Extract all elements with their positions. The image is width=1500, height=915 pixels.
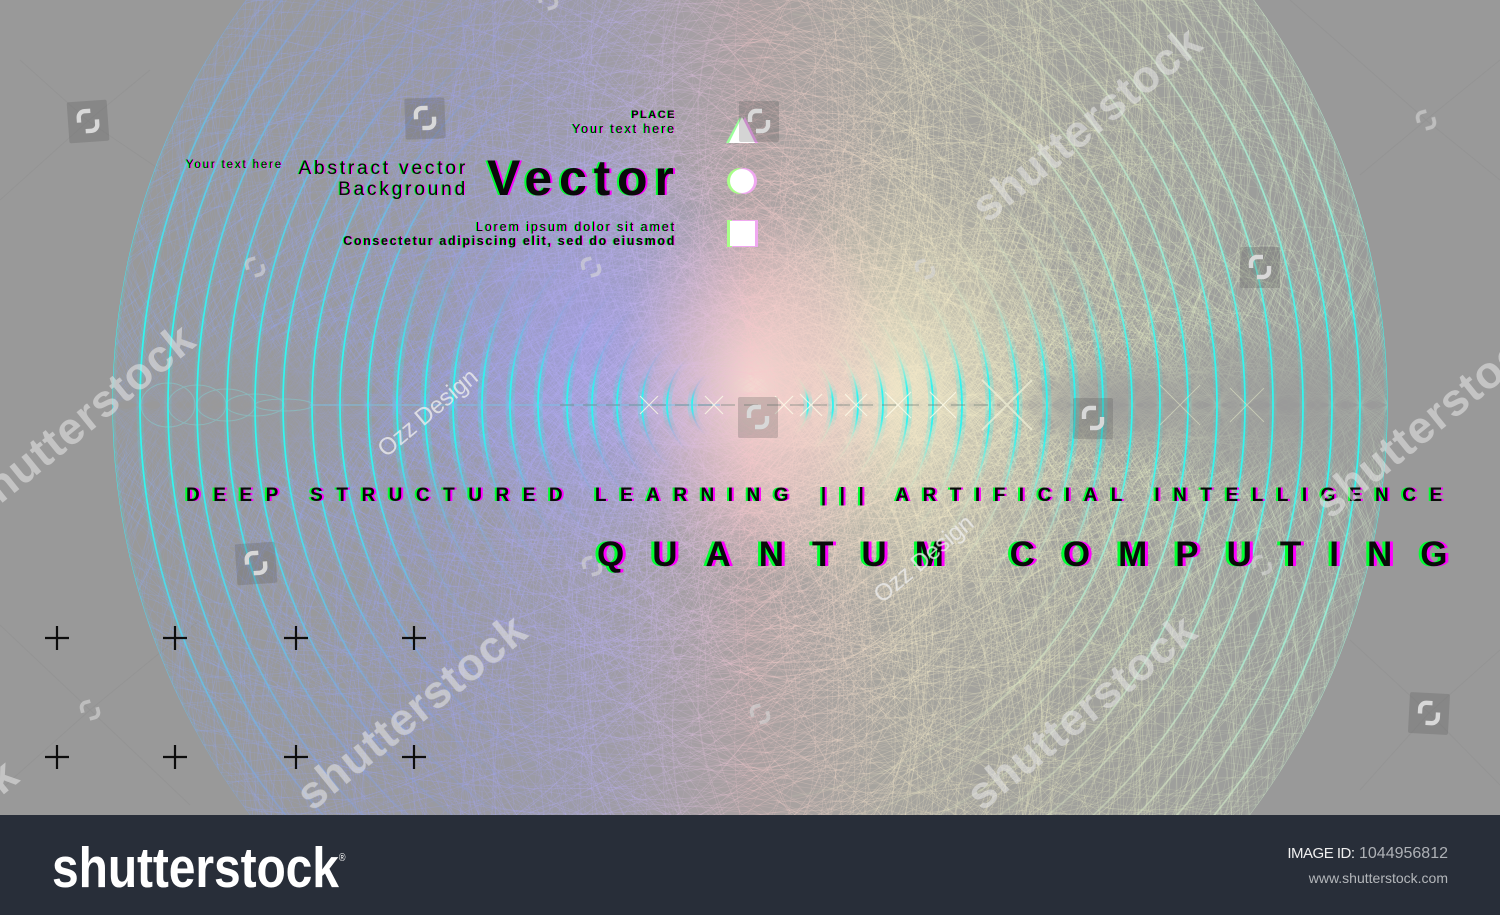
diagonal shutterstock watermarks: shutterstock bbox=[956, 603, 1207, 815]
Ozz Design watermarks: Ozz Design bbox=[373, 363, 483, 463]
website url: www.shutterstock.com bbox=[1309, 870, 1448, 886]
left concentric arcs bbox=[112, 0, 703, 815]
image id: IMAGE ID: 1044956812 bbox=[1287, 845, 1448, 862]
heading: vector: Vector bbox=[487, 150, 681, 206]
icon: circle bbox=[727, 168, 757, 194]
wave field mesh lines bbox=[112, 0, 1387, 815]
plus markers grid bbox=[45, 626, 426, 769]
icon: square bbox=[727, 220, 758, 247]
text block: lorem ipsum bbox=[342, 220, 676, 248]
title: quantum computing: QUANTUM COMPUTING bbox=[597, 535, 1475, 574]
text block: your text here, top: Your text here bbox=[572, 122, 676, 136]
text block: abstract vector background: Background bbox=[338, 179, 468, 200]
text block: place label: PLACE bbox=[631, 109, 676, 121]
Ozz Design watermarks bbox=[373, 363, 979, 609]
wave field colour wash bbox=[420, 0, 1091, 815]
text block: your text here, left: Your text here bbox=[186, 159, 283, 171]
Ozz Design watermarks: Ozz Design bbox=[869, 509, 979, 609]
subtitle: deep structured learning artificial intelligence: DEEP STRUCTURED LEARNING ||| ARTIFICIAL INTELLIGENCE bbox=[186, 485, 1456, 506]
small watermark marks bbox=[80, 0, 1436, 724]
text block: abstract vector background bbox=[298, 158, 468, 200]
footer bar bbox=[0, 815, 1500, 915]
background artwork: interference wave field bbox=[45, 0, 1388, 815]
watermark logo tiles bbox=[67, 97, 1450, 735]
icon: triangle bbox=[726, 117, 758, 143]
central axis lens shapes and sparkles bbox=[141, 380, 1264, 430]
right concentric arcs bbox=[800, 0, 1388, 815]
text block: lorem ipsum: Lorem ipsum dolor sit amet bbox=[476, 220, 676, 234]
diagonal shutterstock watermarks: shutterstock bbox=[286, 603, 537, 815]
diagonal shutterstock watermarks: shutterstock bbox=[961, 15, 1212, 232]
text block: abstract vector background: Abstract vector bbox=[299, 158, 468, 179]
footer logo: shutterstock® bbox=[52, 837, 345, 900]
text block: lorem ipsum: Consectetur adipiscing elit, sed do eiusmod bbox=[343, 234, 676, 248]
